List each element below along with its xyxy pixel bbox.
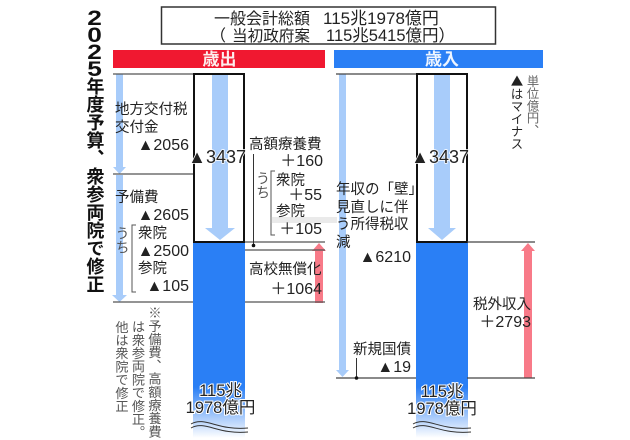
text: lower house medical: 衆院: [276, 172, 305, 189]
revenue chart: [336, 74, 535, 438]
total amount box: （: [210, 27, 226, 45]
reduction box: [194, 74, 244, 242]
bar: expenditure total: [193, 242, 245, 438]
expenditure chart: [112, 74, 326, 439]
total amount box: 115兆1978億円: [323, 9, 439, 28]
label: tuition-free high school: 高校無償化: [249, 261, 322, 278]
total amount box: 一般会計総額: [214, 10, 310, 28]
total amount box: 当初政府案: [232, 27, 310, 45]
label: expenditure total: 115兆: [199, 381, 242, 400]
label: reserve funds: 予備費: [115, 189, 158, 206]
value: new government bonds: ▲19: [377, 359, 411, 376]
total amount box: [162, 7, 496, 45]
unit note: ▲はマイナス: [508, 75, 526, 150]
panel: revenue header: [334, 50, 543, 69]
unit note: [508, 75, 539, 150]
title: vertical heading: 2: [87, 6, 102, 30]
title: vertical heading: 5: [87, 57, 102, 81]
value: tuition-free high school: ＋1064: [270, 281, 322, 298]
bracket: reserve funds: [132, 225, 136, 292]
leader: new bonds: [356, 358, 358, 378]
panel: expenditure header: 歳出: [202, 50, 236, 69]
value: reserve funds: ▲2605: [138, 207, 189, 224]
label: income tax decrease: 見直しに伴: [336, 199, 408, 216]
value: local allocation tax: ▲2056: [138, 137, 189, 154]
value: upper house medical: ＋105: [279, 221, 322, 238]
value: revenue reduction: ▲3437: [411, 147, 469, 167]
label: new government bonds: 新規国債: [353, 341, 411, 358]
panel: expenditure header: [113, 50, 325, 69]
wave break: revenue: [413, 422, 471, 432]
label: non-tax revenue: 税外収入: [473, 296, 531, 313]
arrow: local allocation tax: [113, 74, 126, 174]
label: local allocation tax: 交付金: [115, 119, 159, 136]
bar: revenue total: [416, 242, 468, 438]
label: income tax decrease: 減: [336, 234, 351, 251]
unit note: 単位億円、: [525, 75, 539, 136]
title: vertical heading: 2: [87, 40, 102, 64]
text: upper house medical: 参院: [276, 203, 305, 220]
guide lines: [113, 74, 325, 302]
value: lower house medical: ＋55: [288, 187, 322, 204]
value: upper house reserve funds: ▲105: [146, 278, 189, 295]
label: revenue total: 115兆: [421, 382, 463, 401]
note: revised items: ※予備費、高額療養費: [146, 306, 162, 438]
label: of which: うち: [114, 226, 130, 254]
arrow: reserve funds: [112, 175, 127, 302]
value: income tax decrease: ▲6210: [360, 249, 411, 266]
label: local allocation tax: 地方交付税: [115, 101, 188, 118]
value: lower house reserve funds: ▲2500: [138, 243, 189, 260]
text: upper house reserve funds: 参院: [138, 260, 167, 277]
label: income tax decrease: 年収の「壁」: [336, 181, 423, 198]
label: expenditure total: 1978億円: [186, 398, 255, 417]
arrow: non-tax revenue: [521, 243, 535, 378]
watermark band: [270, 217, 337, 223]
value: non-tax revenue: ＋2793: [479, 314, 531, 331]
label: high-cost medical: 高額療養費: [249, 135, 322, 153]
title: vertical heading: 0: [87, 23, 102, 47]
label: of which medical: うち: [255, 171, 271, 199]
note: revised items: は衆参両院で修正。: [130, 320, 145, 439]
label: income tax decrease: う所得税収: [336, 216, 409, 233]
arrow: central revenue decrease: [428, 75, 456, 240]
note: revised items: 他は衆院で修正: [114, 320, 128, 412]
leader dot: new bonds: [355, 376, 358, 380]
guide lines: revenue: [336, 74, 535, 378]
title: vertical heading: 年度予算、衆参両院で修正: [84, 76, 104, 293]
leader: high-cost medical: [252, 154, 254, 245]
arrow: high-cost medical and tuition: [312, 243, 326, 303]
wave break: [191, 422, 248, 432]
text: lower house reserve funds: 衆院: [138, 225, 167, 242]
bracket: high-cost medical: [271, 171, 275, 235]
arrow: revenue decrease: [336, 74, 349, 377]
value: expenditure reduction: ▲3437: [188, 147, 246, 167]
reduction box: revenue: [417, 74, 467, 242]
value: high-cost medical: ＋160: [280, 153, 323, 170]
leader dot: [252, 244, 255, 247]
label: revenue total: 1978億円: [407, 399, 477, 418]
total amount box: 115兆5415億円）: [326, 26, 455, 45]
arrow: central decrease: [205, 75, 235, 240]
panel: revenue header: 歳入: [425, 50, 459, 69]
